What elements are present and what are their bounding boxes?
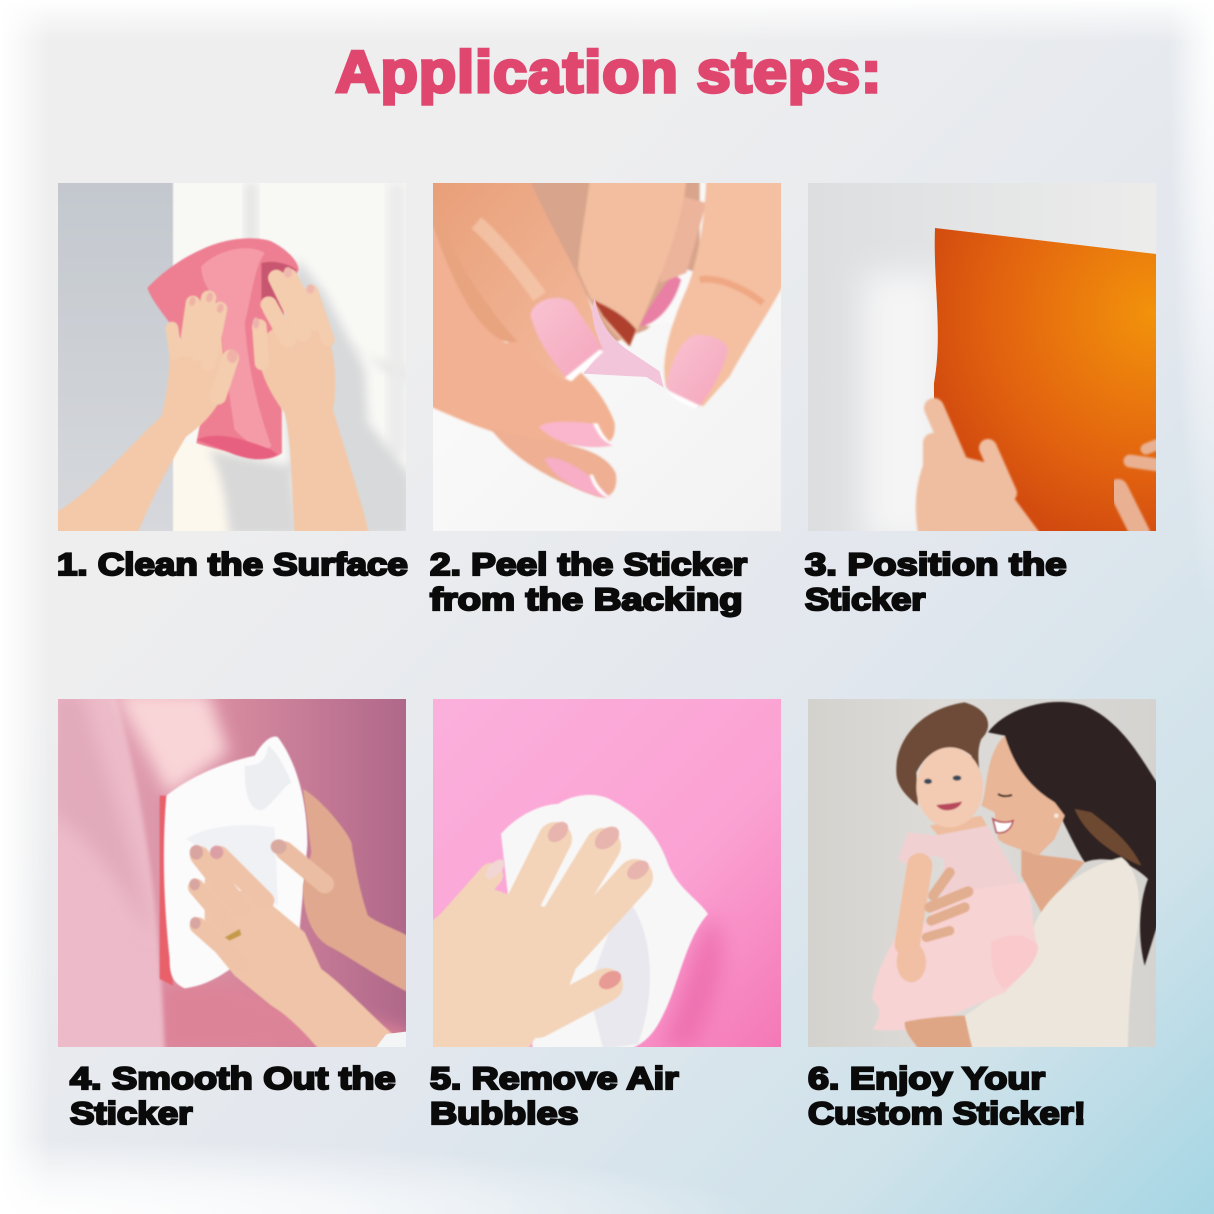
icon: mother xyxy=(965,702,1161,1052)
icon: white towel xyxy=(164,736,307,988)
icon: middle finger xyxy=(578,180,686,346)
icon: pink towel xyxy=(147,238,299,459)
icon: ring finger xyxy=(664,180,784,406)
icon: hand xyxy=(428,818,652,1049)
caption: step 2: 2. Peel the Sticker xyxy=(430,546,747,582)
caption: step 3: 3. Position the xyxy=(805,546,1067,582)
icon: left hand xyxy=(916,408,1040,533)
caption: step 5: 5. Remove Air xyxy=(430,1060,679,1096)
caption: step 4: 4. Smooth Out the xyxy=(70,1060,396,1096)
caption: step 6: Custom Sticker! xyxy=(808,1095,1086,1131)
panel: step 3 position the sticker photo xyxy=(808,183,1156,531)
icon: mother's hand and forearm xyxy=(905,872,973,1052)
caption: step 2 xyxy=(429,546,748,618)
caption: step 6 xyxy=(808,1060,1086,1131)
title: Application steps: xyxy=(336,40,882,105)
icon: lower finger xyxy=(490,428,616,497)
caption: step 2: from the Backing xyxy=(430,581,743,617)
caption: step 5: Bubbles xyxy=(430,1095,578,1131)
icon: left hand xyxy=(55,291,238,536)
caption: step 4 xyxy=(69,1060,396,1131)
icon: index finger xyxy=(430,180,604,381)
icon: white cloth xyxy=(501,795,708,1049)
icon: right fingers xyxy=(1118,445,1158,533)
icon: white cuff xyxy=(376,1032,406,1047)
icon: right hand behind towel xyxy=(271,789,411,994)
icon: thumb xyxy=(430,216,615,445)
panel: step 2 peel the sticker photo xyxy=(433,183,781,531)
icon: right hand xyxy=(253,267,370,536)
caption: step 5 xyxy=(430,1060,680,1131)
caption: step 6: 6. Enjoy Your xyxy=(808,1060,1045,1096)
icon: nails xyxy=(530,298,728,498)
caption: step 3 xyxy=(804,546,1067,617)
caption: step 1: 1. Clean the Surface xyxy=(57,546,408,582)
towel shadow xyxy=(160,796,173,986)
icon: baby xyxy=(872,702,1038,1031)
panel: step 1 clean the surface photo xyxy=(58,183,406,531)
caption: step 3: Sticker xyxy=(805,581,925,617)
caption: step 4: Sticker xyxy=(70,1095,192,1131)
panel: step 6 enjoy your custom sticker photo xyxy=(808,699,1156,1047)
panel: step 5 remove air bubbles photo xyxy=(433,699,781,1047)
panel: step 4 smooth out the sticker photo xyxy=(58,699,406,1047)
icon: peeled sticker xyxy=(583,298,664,388)
icon: left hand on towel xyxy=(189,845,396,1052)
